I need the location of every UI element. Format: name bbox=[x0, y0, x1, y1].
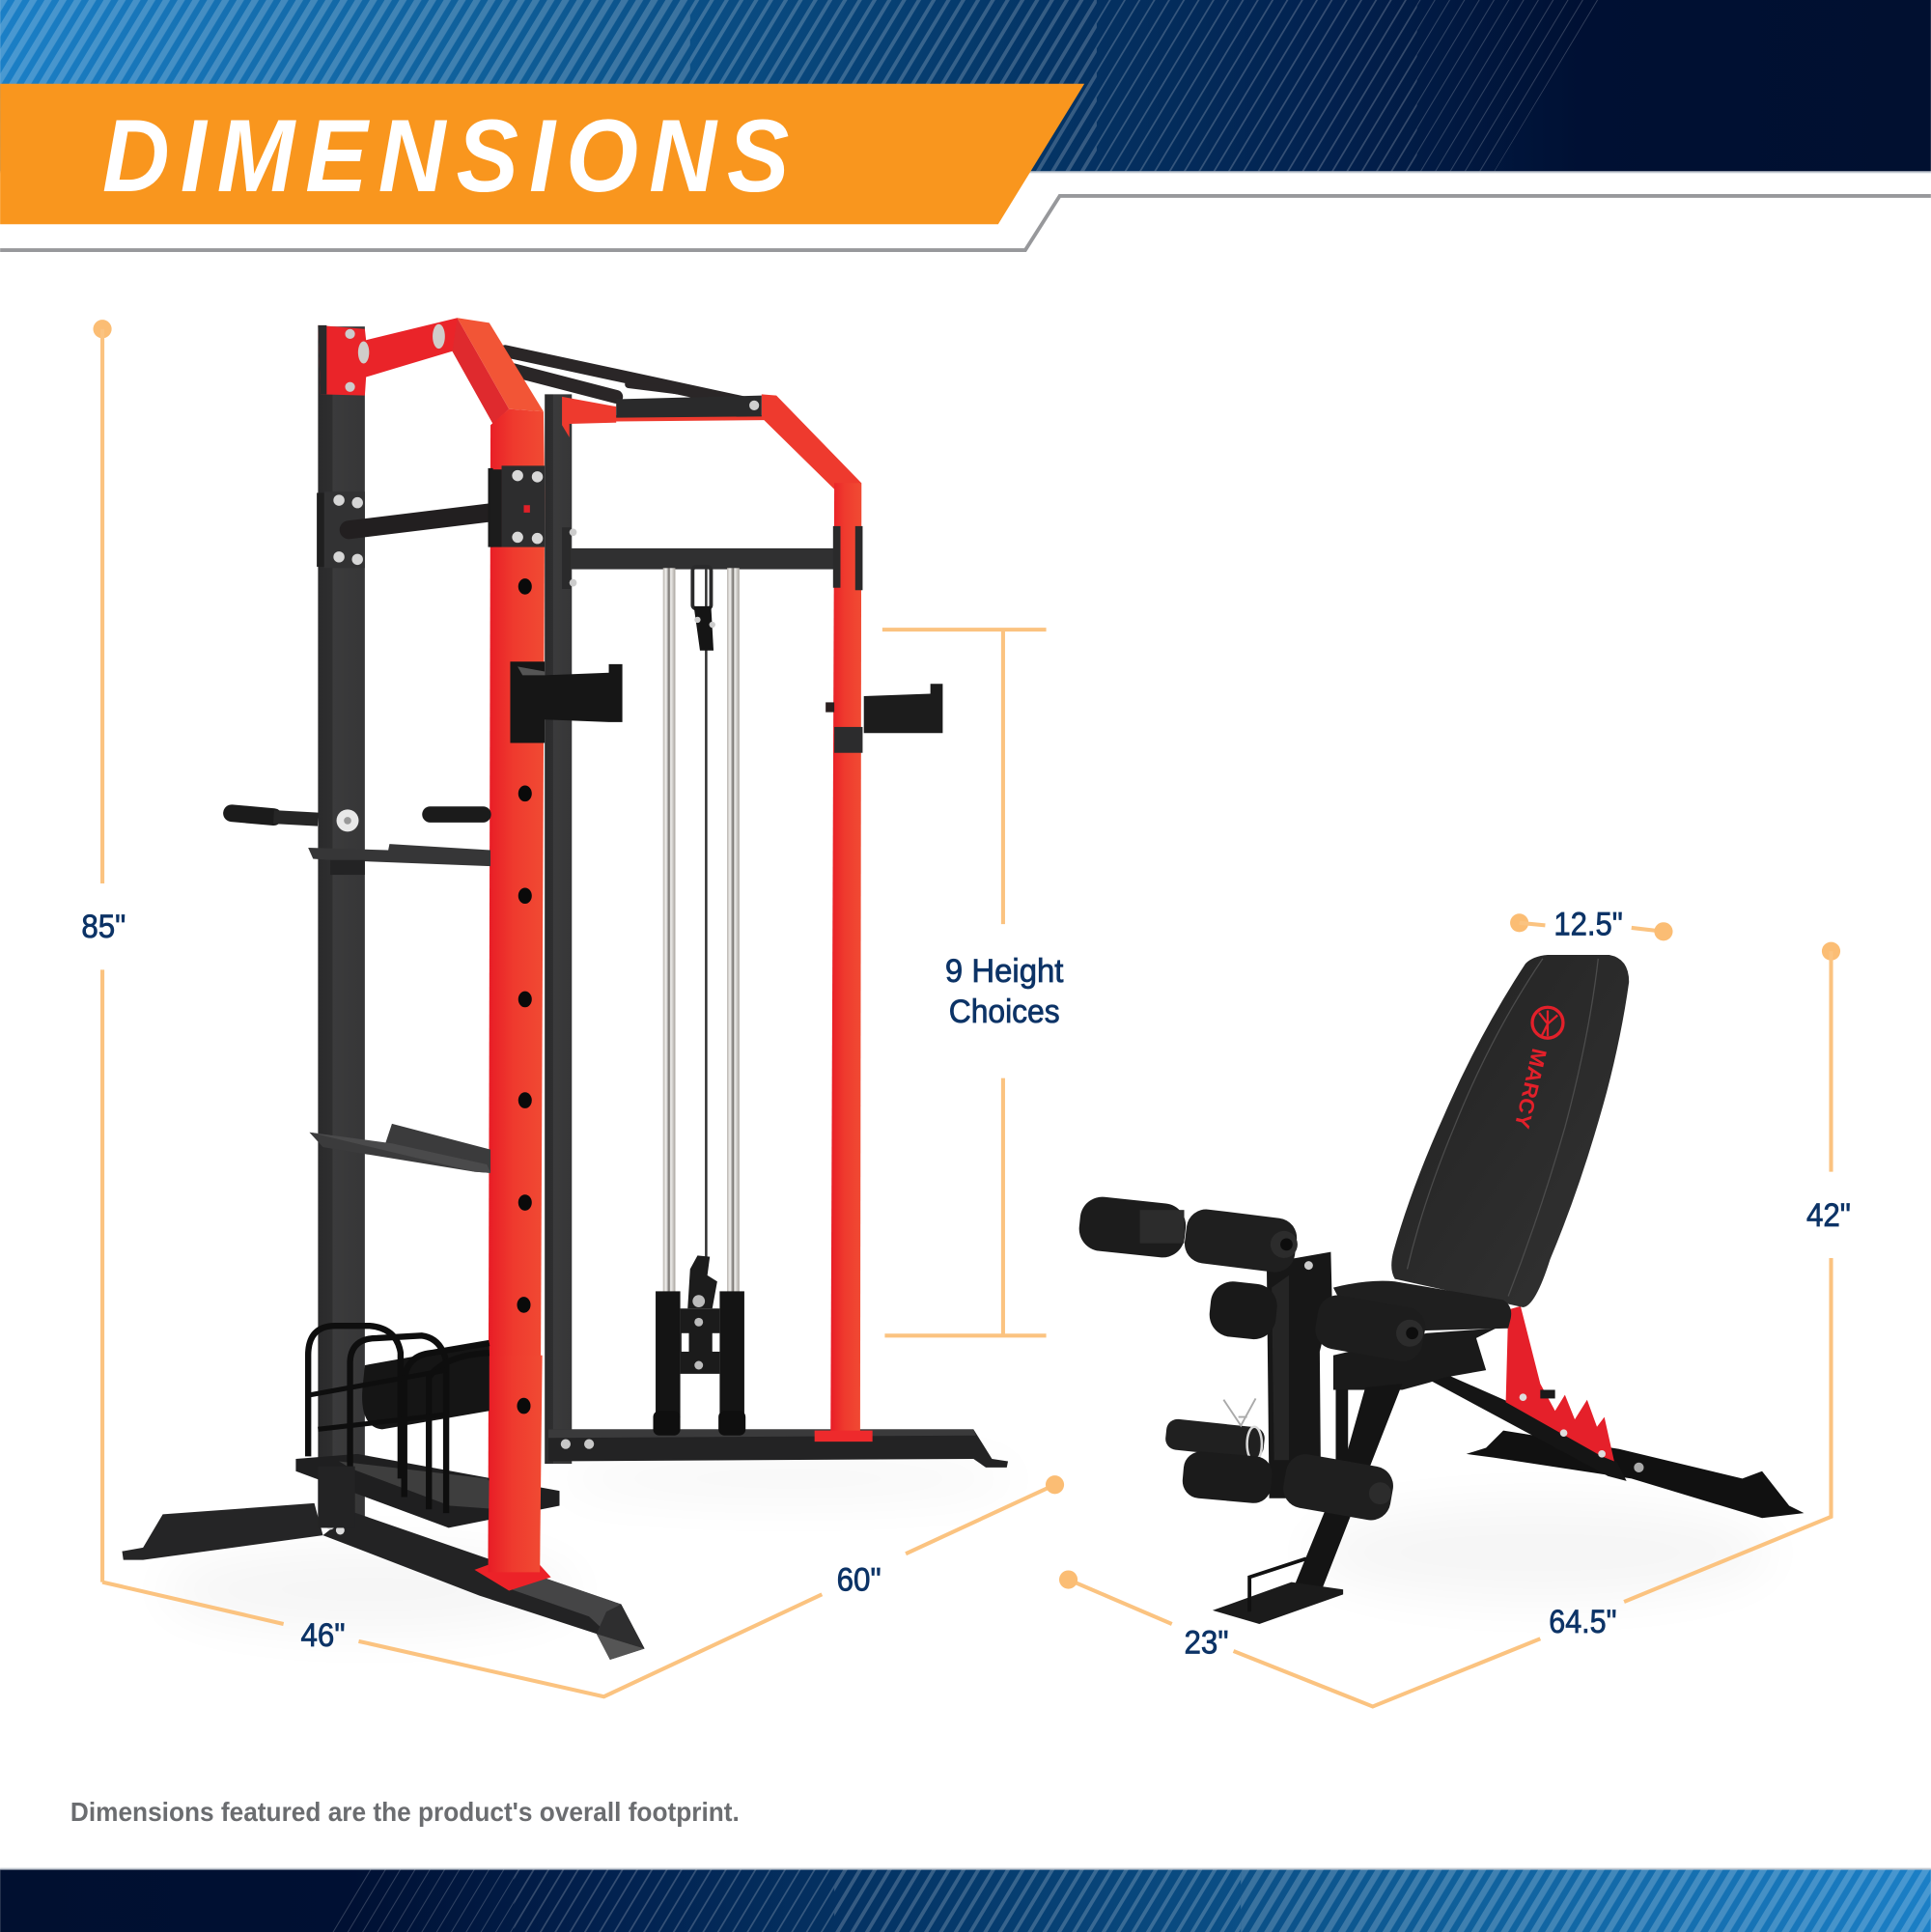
power rack bbox=[122, 318, 1008, 1660]
weight stack guide bbox=[653, 1255, 745, 1436]
header rule bbox=[0, 196, 1931, 250]
dimension: rack height bbox=[81, 320, 126, 1582]
rear left cap bolts bbox=[317, 492, 324, 567]
front base beam bbox=[322, 1512, 645, 1660]
right red upright bbox=[830, 483, 861, 1436]
leg roller top left bbox=[1077, 1194, 1188, 1260]
right spotter arm bbox=[826, 684, 942, 753]
dip handles bbox=[232, 809, 483, 831]
title: DIMENSIONS bbox=[102, 98, 800, 213]
back pad bbox=[1391, 955, 1629, 1307]
lower strut bbox=[1335, 1389, 1348, 1464]
header band bbox=[0, 0, 1931, 173]
label: 64.5: 64.5" bbox=[1549, 1604, 1616, 1640]
foot handle bbox=[1249, 1558, 1306, 1611]
tray bbox=[295, 1454, 560, 1527]
label: 23: 23" bbox=[1185, 1625, 1228, 1662]
weight sleeve bbox=[1164, 1398, 1266, 1462]
rear red top frame bbox=[562, 394, 861, 530]
left spotter arm bbox=[510, 661, 623, 743]
bench bbox=[1077, 955, 1804, 1624]
front red foot bbox=[474, 1565, 551, 1591]
title banner bbox=[0, 84, 1084, 224]
label: 9 height: 9 Height bbox=[945, 953, 1064, 990]
upright plate bbox=[488, 465, 545, 547]
front left post bbox=[318, 326, 365, 1522]
brand name: MARCY bbox=[1510, 1047, 1552, 1132]
dimension: bench width bbox=[1059, 1570, 1228, 1662]
dimension: bench height bbox=[1624, 942, 1851, 1602]
label: choices: Choices bbox=[949, 994, 1060, 1030]
dimension: rack depth bbox=[837, 1475, 1064, 1599]
floor shadows bbox=[160, 1456, 1775, 1633]
logo bbox=[1532, 1007, 1563, 1038]
leg roller middle bbox=[1312, 1292, 1428, 1364]
upper shelf bbox=[308, 844, 490, 866]
top rear bars bbox=[505, 351, 752, 405]
label: 12.5: 12.5" bbox=[1553, 907, 1623, 943]
leg roller lower right bbox=[1280, 1451, 1396, 1524]
rear base beam bbox=[548, 1429, 1008, 1468]
foot plate bbox=[1213, 1582, 1343, 1624]
crossbar bbox=[562, 526, 862, 590]
leg roller lower left bbox=[1181, 1450, 1273, 1504]
dimension: height choices bbox=[882, 630, 1064, 1335]
cable rods bbox=[663, 568, 740, 1293]
front red upright bbox=[488, 409, 545, 1575]
back leg roller bbox=[1207, 1279, 1279, 1341]
rear base bbox=[1467, 1431, 1804, 1518]
rear left post foot bbox=[318, 1467, 355, 1527]
hoops bbox=[308, 1326, 490, 1513]
seat frame bbox=[1333, 1329, 1496, 1389]
stored roller bbox=[362, 1343, 490, 1429]
pulley bbox=[692, 567, 715, 651]
dimension: bench back width bbox=[1510, 907, 1673, 943]
label: 46: 46" bbox=[301, 1617, 345, 1654]
angled front leg bbox=[1294, 1384, 1402, 1592]
leg roller top right bbox=[1183, 1207, 1299, 1274]
top red frame bbox=[318, 318, 544, 424]
dimension: rack width bbox=[102, 1582, 822, 1696]
post plate bbox=[324, 491, 365, 568]
roller storage bbox=[295, 1326, 560, 1527]
rear right post bbox=[545, 394, 572, 1464]
dimension: bench length bbox=[1234, 1604, 1616, 1706]
front upright lower overlap bbox=[488, 1356, 543, 1572]
vertical post bbox=[1267, 1252, 1332, 1498]
upright holes bbox=[517, 578, 532, 1414]
dip bar bbox=[349, 513, 490, 530]
label: 85: 85" bbox=[81, 909, 126, 945]
red bracket bbox=[1506, 1306, 1644, 1472]
footer band bbox=[0, 1868, 1931, 1932]
main rail bbox=[1429, 1370, 1627, 1481]
label: 60: 60" bbox=[837, 1562, 882, 1599]
label: 42: 42" bbox=[1806, 1197, 1851, 1234]
left base arm bbox=[122, 1503, 322, 1560]
seat pad bbox=[1333, 1281, 1511, 1330]
lower shelf bbox=[309, 1124, 490, 1173]
footnote: Dimensions featured are the product's overall footprint. bbox=[70, 1797, 740, 1827]
red foot plate bbox=[815, 1431, 873, 1442]
